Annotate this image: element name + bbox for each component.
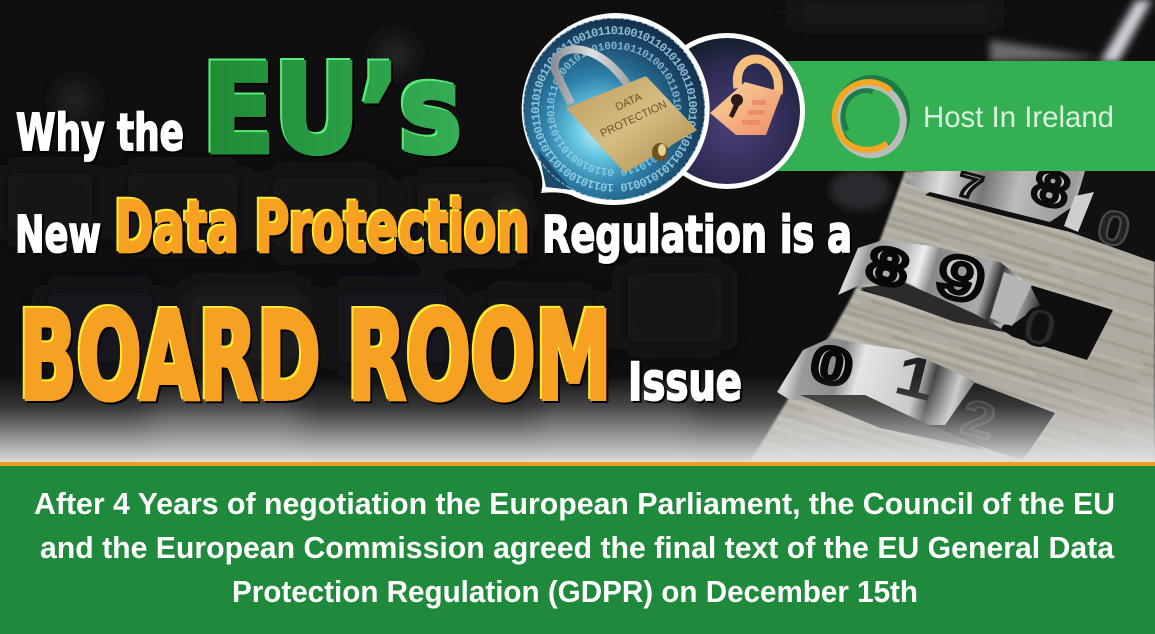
bottom wheel — [777, 334, 1055, 460]
binary digit rings: 10110100101101001101010011010110010110100101101010011010010110101101010010 — [531, 26, 698, 192]
top wheel: 8 — [1027, 158, 1075, 219]
summary text: Protection Regulation (GDPR) on December 15th — [232, 574, 918, 609]
binary digit rings: 011010010110100101101001011010010110100101101001011010010110 — [546, 42, 682, 176]
photo: combination lock — [750, 0, 1155, 462]
gold padlock: DATA — [614, 91, 644, 114]
line 1: Why the EU's: EU’s — [203, 39, 462, 181]
line 1: Why the EU's — [16, 39, 462, 181]
middle wheel: 9 — [931, 241, 991, 317]
image: data protection speech bubble — [522, 13, 710, 205]
binary digit rings: 0011001101001011010011010011001011001101001011010010110100101100110100101011010011010010 — [523, 18, 705, 200]
gold padlock — [555, 49, 697, 173]
logo: Host In Ireland — [825, 73, 1114, 164]
logo wordmark: Host In Ireland — [923, 101, 1114, 134]
middle wheel: 8 — [863, 235, 913, 298]
top wheel: 0 — [1091, 199, 1136, 259]
line 3: BOARD ROOM Issue: Issue — [628, 352, 742, 413]
icon: interlocking rings — [825, 73, 913, 164]
line 1: Why the EU's: Why the — [16, 104, 184, 163]
summary text: and the European Commission agreed the final text of the EU General Data — [40, 530, 1115, 565]
line 2: New Data Protection Regulation is a: New — [15, 206, 101, 265]
bottom fade to light grey — [0, 375, 1155, 463]
line 2: New Data Protection Regulation is a: Data Protection — [115, 186, 530, 269]
middle wheel: 0 — [1015, 295, 1064, 360]
line 2: New Data Protection Regulation is a: Regulation is a — [542, 206, 852, 265]
background: blurred keyboard photo — [0, 0, 1155, 466]
middle wheel — [838, 235, 1113, 360]
summary text: After 4 Years of negotiation the European Parliament, the Council of the EU — [34, 486, 1115, 521]
summary text — [34, 486, 1115, 609]
blurred lock fragments near the banner — [830, 0, 1152, 210]
bottom wheel: 1 — [889, 341, 942, 414]
top wheel — [905, 158, 1155, 262]
image: orange padlock circle — [683, 33, 805, 189]
top wheel: 7 — [953, 165, 987, 208]
lock plate — [750, 171, 1155, 462]
green banner — [770, 61, 1155, 171]
bottom wheel: 0 — [807, 334, 857, 397]
line 3: BOARD ROOM Issue: BOARD ROOM — [19, 286, 612, 428]
headline — [15, 39, 852, 428]
orange divider — [0, 462, 1155, 466]
gold padlock: PROTECTION — [599, 99, 669, 140]
small padlock — [710, 59, 782, 135]
panel: green summary band — [0, 466, 1155, 634]
bottom wheel: 2 — [955, 388, 1001, 451]
